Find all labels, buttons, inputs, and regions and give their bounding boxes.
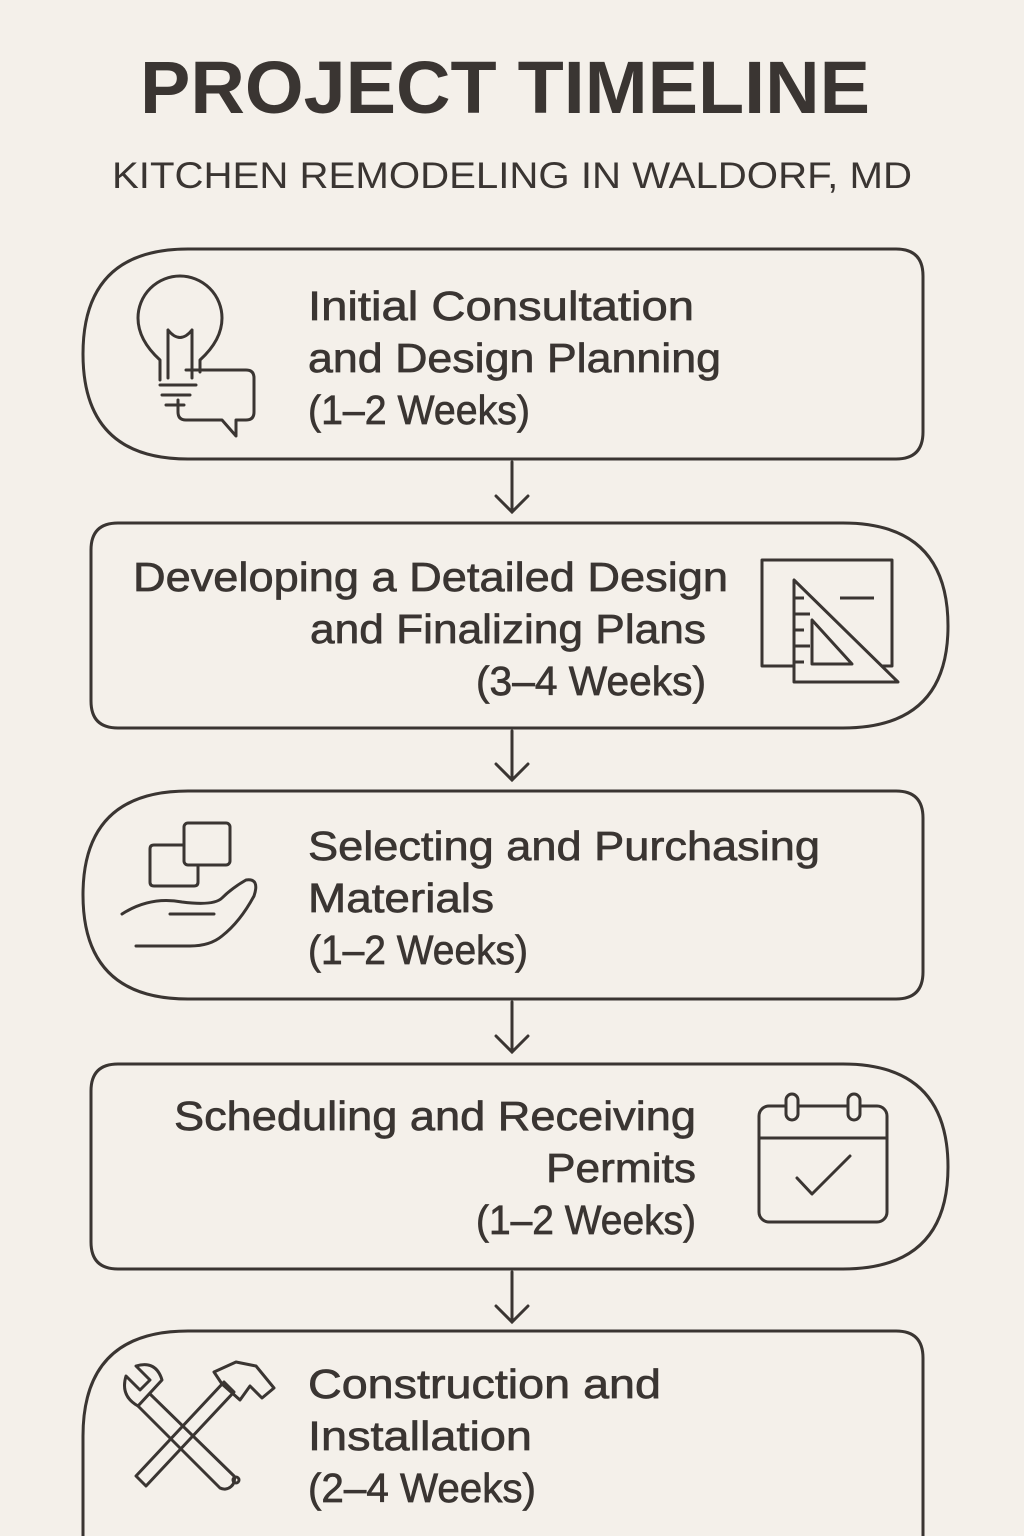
text: step 3: (1–2 Weeks) bbox=[308, 927, 528, 973]
panel: step 4 bbox=[91, 1064, 948, 1269]
text: step 3: Materials bbox=[308, 875, 494, 921]
text: step 1: and Design Planning bbox=[308, 335, 721, 381]
text: step 1: (1–2 Weeks) bbox=[308, 387, 530, 433]
icon: calendar with check bbox=[759, 1094, 887, 1222]
text: step 4: Scheduling and Receiving bbox=[174, 1093, 696, 1139]
text: step 5: Installation bbox=[308, 1413, 532, 1459]
panel: step 3 bbox=[83, 791, 923, 999]
text: step 3: Selecting and Purchasing bbox=[308, 823, 820, 869]
subtitle: KITCHEN REMODELING IN WALDORF, MD bbox=[112, 155, 912, 196]
icon: wrench and hammer bbox=[124, 1362, 274, 1489]
text: step 5: Construction and bbox=[308, 1361, 661, 1407]
arrow 4 bbox=[496, 1272, 528, 1322]
text: step 2: and Finalizing Plans bbox=[310, 606, 706, 652]
text: step 2: Developing a Detailed Design bbox=[133, 554, 728, 600]
text: step 5: (2–4 Weeks) bbox=[308, 1465, 536, 1511]
icon: blueprint with triangle ruler bbox=[762, 560, 898, 682]
arrow 3 bbox=[496, 1002, 528, 1052]
text: step 4: (1–2 Weeks) bbox=[476, 1197, 696, 1243]
text: step 4: Permits bbox=[546, 1145, 696, 1191]
arrow 1 bbox=[496, 462, 528, 512]
title: PROJECT TIMELINE bbox=[140, 46, 870, 129]
icon: lightbulb with speech bubble bbox=[138, 276, 254, 436]
arrow 2 bbox=[496, 731, 528, 780]
icon: hand holding boxes bbox=[122, 823, 256, 946]
text: step 2: (3–4 Weeks) bbox=[476, 658, 706, 704]
panel: step 5 bbox=[83, 1331, 923, 1536]
panel: step 1 bbox=[83, 249, 923, 459]
text: step 1: Initial Consultation bbox=[308, 283, 694, 329]
panel: step 2 bbox=[91, 523, 948, 728]
